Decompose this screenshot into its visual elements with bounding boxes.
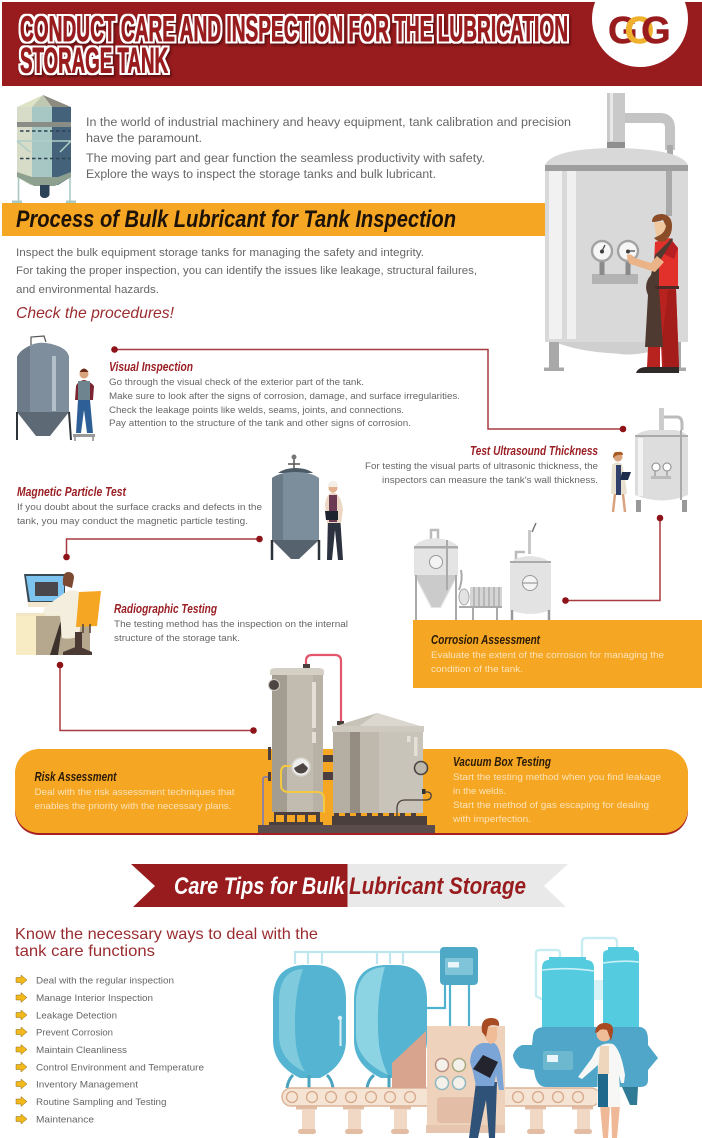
care heading — [15, 926, 318, 960]
icon: radiographic workstation — [16, 572, 101, 655]
checklist: care tips: Deal with the regular inspection — [36, 976, 174, 986]
text block: risk assessment — [34, 770, 235, 812]
intro paragraph: and environmental hazards. — [16, 284, 159, 296]
text block: radiographic testing: Radiographic Testing — [114, 602, 217, 616]
text block: radiographic testing: The testing method has the inspection on the internal — [114, 619, 348, 630]
woman in lab coat — [578, 1023, 625, 1138]
connector: visual inspection to ultrasound — [111, 346, 626, 432]
text block: magnetic particle test: Magnetic Particle Test — [17, 485, 127, 499]
intro text: The moving part and gear function the seamless productivity with safety. — [86, 151, 485, 165]
text block: ultrasound thickness: For testing the visual parts of ultrasonic thickness, the — [365, 461, 598, 472]
intro text: In the world of industrial machinery and heavy equipment, tank calibration and precision — [86, 115, 571, 129]
text block: risk assessment: Risk Assessment — [34, 770, 117, 784]
blue tanks — [273, 965, 346, 1078]
title — [20, 10, 568, 80]
icon: grey tank with inspector — [17, 336, 95, 441]
panel: corrosion assessment: Corrosion Assessment — [431, 633, 541, 647]
checklist: care tips: Maintain Cleanliness — [36, 1045, 127, 1056]
panel: risk and vacuum testing — [15, 749, 688, 835]
panel: corrosion assessment — [413, 620, 702, 688]
checklist: care tips — [16, 975, 204, 1126]
illustration: plant with engineers — [273, 938, 658, 1138]
checklist: care tips: Control Environment and Temperature — [36, 1062, 204, 1074]
text block: ultrasound thickness — [365, 444, 598, 486]
text block: visual inspection — [109, 360, 460, 429]
ribbon: care tips heading — [131, 864, 568, 907]
logo — [592, 0, 688, 67]
icon: dark tank with technician — [272, 454, 343, 560]
intro paragraph: For taking the proper inspection, you can identify the issues like leakage, structural failures, — [16, 265, 477, 277]
right machine tanks — [542, 957, 594, 1030]
intro paragraph: Inspect the bulk equipment storage tanks for managing the safety and integrity. — [16, 247, 424, 259]
connector: magnetic test to radiographic — [63, 536, 263, 560]
icon: silo — [12, 95, 76, 203]
checklist: care tips: Routine Sampling and Testing — [36, 1097, 166, 1108]
text block: magnetic particle test: If you doubt about the surface cracks and defects in the — [17, 502, 262, 513]
icon: corrosion assessment equipment — [414, 523, 551, 620]
man with clipboard — [469, 1018, 504, 1138]
connector: ultrasound to corrosion — [562, 515, 663, 604]
text block: magnetic particle test — [17, 485, 262, 527]
tall tank — [272, 672, 323, 812]
text block: vacuum box testing: Start the method of gas escaping for dealing — [453, 800, 649, 811]
inspector woman — [611, 452, 631, 512]
logo: GOG — [608, 10, 669, 52]
illustration: large tank with worker — [544, 93, 688, 373]
intro text: have the paramount. — [86, 131, 202, 145]
text block: vacuum box testing: in the welds. — [453, 786, 506, 797]
text block: ultrasound thickness: Test Ultrasound Thickness — [470, 444, 598, 458]
subheading: Check the procedures! — [16, 305, 175, 322]
intro text — [86, 115, 571, 181]
care heading: Know the necessary ways to deal with the — [15, 926, 318, 943]
text block: visual inspection: Visual Inspection — [109, 360, 193, 374]
text block: radiographic testing: structure of the storage tank. — [114, 633, 240, 644]
text block: vacuum box testing: Vacuum Box Testing — [453, 755, 551, 769]
intro text: Explore the ways to inspect the storage tanks and bulk lubricant. — [86, 167, 436, 181]
checklist: care tips: Inventory Management — [36, 1080, 138, 1090]
text block: magnetic particle test: tank, you may conduct the magnetic particle testing. — [17, 516, 248, 527]
connector: radiographic to vacuum equipment — [57, 662, 257, 734]
text block: visual inspection: Check the leakage points like welds, seams, joints, and connections. — [109, 405, 404, 416]
checklist: care tips: Leakage Detection — [36, 1010, 117, 1022]
small tank — [659, 408, 664, 430]
text block: vacuum box testing: with imperfection. — [452, 814, 531, 825]
checklist: care tips: Manage Interior Inspection — [36, 993, 153, 1004]
panel: corrosion assessment: condition of the tank. — [431, 664, 523, 675]
text block: risk assessment: enables the priority with the necessary plans. — [34, 801, 232, 812]
header banner — [2, 0, 702, 86]
care heading: tank care functions — [15, 943, 155, 960]
text block: visual inspection: Go through the visual check of the exterior part of the tank. — [109, 377, 364, 388]
text block: ultrasound thickness: inspectors can measure the tank's wall thickness. — [382, 475, 598, 486]
worker — [627, 214, 679, 373]
squat tank — [333, 713, 423, 727]
inspector — [73, 368, 95, 441]
control box — [440, 947, 478, 985]
icon: ultrasound woman and small tank — [611, 408, 688, 512]
title: STORAGE TANK — [20, 42, 168, 80]
text block: visual inspection: Pay attention to the structure of the tank and other signs of corrosion. — [109, 418, 411, 429]
text block: risk assessment: Deal with the risk assessment techniques that — [34, 787, 235, 798]
illustration: vacuum tanks — [258, 655, 435, 833]
conveyor — [296, 1106, 317, 1110]
checklist: care tips: Prevent Corrosion — [36, 1028, 113, 1038]
checklist: care tips: Maintenance — [36, 1114, 94, 1126]
ribbon: care tips heading: Lubricant Storage — [349, 873, 526, 900]
text block: visual inspection: Make sure to look after the signs of corrosion, damage, and surface irregularities. — [109, 391, 460, 402]
ribbon: care tips heading: Care Tips for Bulk — [174, 873, 346, 900]
console — [392, 1031, 426, 1088]
pipes — [295, 952, 441, 964]
text block: radiographic testing — [114, 602, 348, 644]
apron — [645, 238, 673, 347]
section heading band: Process of Bulk Lubricant for Tank Inspection — [16, 206, 456, 233]
text block: vacuum box testing: Start the testing method when you find leakage — [453, 772, 661, 783]
text block: vacuum box testing — [452, 755, 661, 825]
panel: corrosion assessment: Evaluate the extent of the corrosion for managing the — [431, 650, 664, 661]
technician — [325, 481, 343, 560]
intro paragraph — [16, 247, 477, 296]
